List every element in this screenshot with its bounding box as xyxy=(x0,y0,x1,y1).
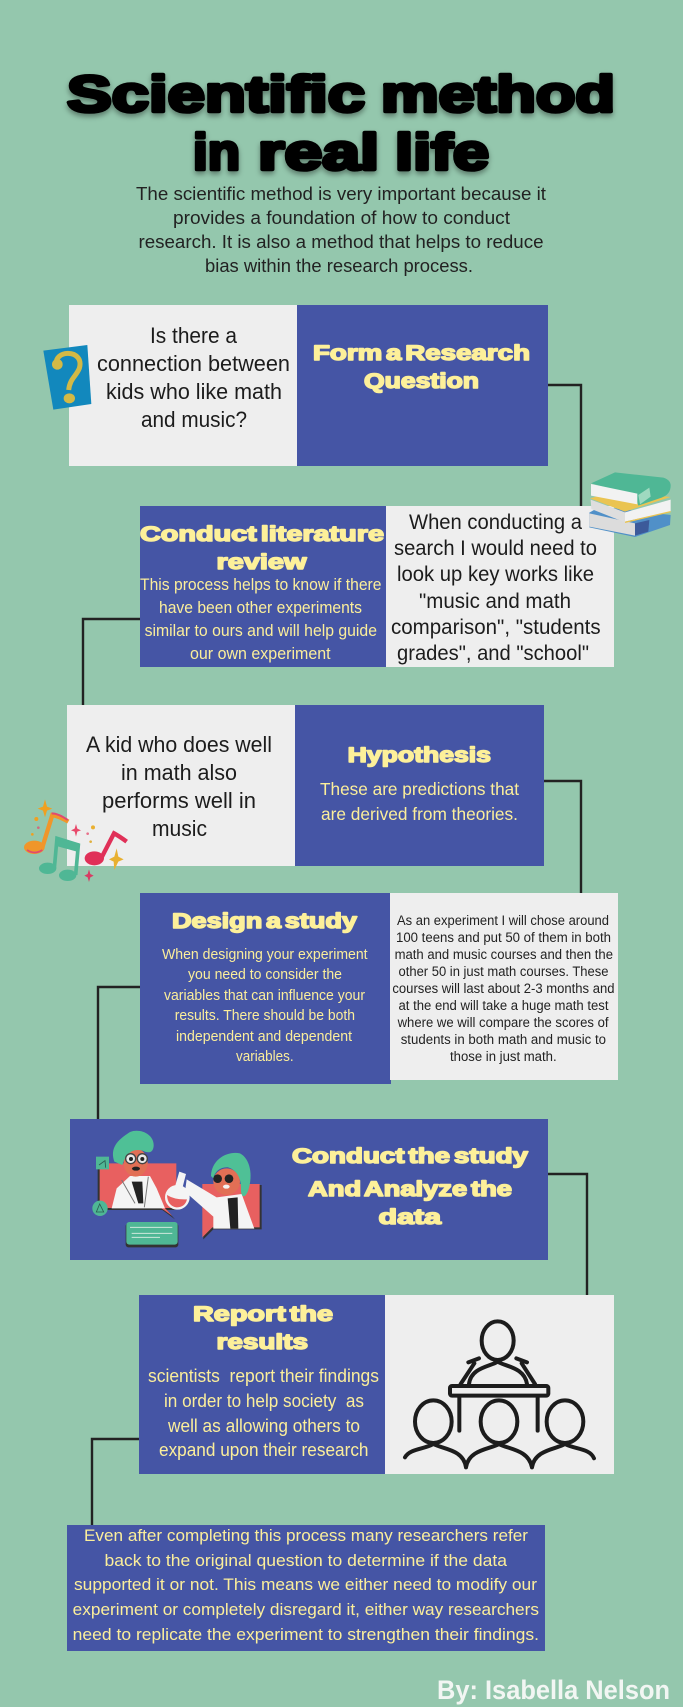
panel: conduct literature review xyxy=(140,506,614,667)
heading: conduct the study and analyze the data: And Analyze the xyxy=(308,1178,512,1201)
heading: conduct literature review xyxy=(140,523,384,574)
design description xyxy=(162,946,368,1065)
heading: conduct the study and analyze the data: data xyxy=(378,1206,441,1229)
heading: form a research question xyxy=(313,342,530,393)
title: life xyxy=(395,124,489,180)
connector: hypothesis to design xyxy=(544,781,581,893)
connector: conduct to report xyxy=(548,1174,587,1295)
design description: When designing your experiment xyxy=(162,946,368,963)
experiment plan text: As an experiment I will chose around xyxy=(397,913,609,928)
panel: conduct the study xyxy=(70,1119,548,1260)
report description: scientists report their findings xyxy=(148,1366,379,1386)
panel: report the results xyxy=(139,1295,614,1474)
panel: hypothesis xyxy=(67,705,544,866)
author credit: By: Isabella Nelson xyxy=(437,1675,670,1705)
connector: report to conclusion xyxy=(92,1439,139,1525)
intro paragraph: bias within the research process. xyxy=(205,256,473,276)
icon: music notes xyxy=(24,799,127,882)
experiment plan text: courses will last about 2-3 months and xyxy=(392,981,614,996)
connector: design to conduct xyxy=(98,987,140,1119)
heading: report the results: Report the xyxy=(193,1303,333,1326)
heading: conduct the study and analyze the data xyxy=(292,1145,528,1229)
conclusion text: Even after completing this process many researchers refer xyxy=(84,1526,528,1545)
heading: form a research question: Form a Research xyxy=(313,342,530,365)
experiment plan text: math and music courses and then the xyxy=(395,947,613,962)
literature review description: our own experiment xyxy=(190,645,331,663)
literature search text: grades", and "school" xyxy=(397,642,589,665)
report description: well as allowing others to xyxy=(167,1416,360,1436)
literature search text: comparison", "students xyxy=(391,616,601,639)
panel: conclusion xyxy=(67,1525,545,1651)
literature review description: This process helps to know if there xyxy=(140,576,382,594)
hypothesis description: These are predictions that xyxy=(320,779,519,799)
intro paragraph: The scientific method is very important because it xyxy=(136,184,546,204)
panel: form a research question xyxy=(69,305,548,466)
research question text: Is there a xyxy=(150,323,238,348)
heading: report the results xyxy=(193,1303,333,1354)
report description xyxy=(148,1366,379,1460)
research question text: kids who like math xyxy=(106,379,282,404)
conclusion text: need to replicate the experiment to strengthen their findings. xyxy=(73,1625,539,1644)
title: in xyxy=(193,124,240,180)
title: method xyxy=(381,66,615,122)
design description: variables. xyxy=(236,1048,294,1065)
experiment plan text xyxy=(392,913,614,1064)
hypothesis statement: music xyxy=(152,816,207,841)
panel: design a study xyxy=(140,893,618,1084)
literature review description xyxy=(140,576,382,663)
experiment plan text: students in both math and music to xyxy=(401,1032,606,1047)
heading: conduct literature review: Conduct literature xyxy=(140,523,384,546)
heading: report the results: results xyxy=(216,1331,308,1354)
icon: question mark card xyxy=(43,345,91,410)
research question text xyxy=(97,323,290,432)
literature search text: "music and math xyxy=(419,590,571,613)
conclusion text: experiment or completely disregard it, either way researchers xyxy=(73,1600,539,1619)
heading: conduct the study and analyze the data: Conduct the study xyxy=(292,1145,528,1168)
research question text: and music? xyxy=(141,407,247,432)
experiment plan text: other 50 in just math courses. These xyxy=(398,964,608,979)
title: real xyxy=(258,124,379,180)
design description: independent and dependent xyxy=(176,1028,353,1045)
design description: variables that can influence your xyxy=(164,987,365,1004)
intro paragraph: provides a foundation of how to conduct xyxy=(173,208,510,228)
hypothesis statement: performs well in xyxy=(102,788,256,813)
icon: two scientists with flask xyxy=(92,1131,262,1247)
research question text: connection between xyxy=(97,351,290,376)
conclusion text xyxy=(73,1526,539,1644)
icon: stack of books xyxy=(589,472,671,537)
title xyxy=(67,66,615,180)
literature search text xyxy=(391,511,601,665)
connector: literature review to hypothesis xyxy=(83,619,140,705)
hypothesis description xyxy=(320,779,519,824)
design description: you need to consider the xyxy=(188,966,342,983)
heading: conduct literature review: review xyxy=(216,551,307,574)
hypothesis statement xyxy=(86,732,272,841)
experiment plan text: 100 teens and put 50 of them in both xyxy=(396,930,611,945)
icon: presenter at podium with audience xyxy=(405,1321,594,1467)
hypothesis description: are derived from theories. xyxy=(321,804,518,824)
experiment plan text: those in just math. xyxy=(450,1049,557,1064)
literature search text: search I would need to xyxy=(394,537,597,560)
literature search text: look up key works like xyxy=(397,563,594,586)
intro paragraph: research. It is also a method that helps to reduce xyxy=(138,232,544,252)
experiment plan text: where we will compare the scores of xyxy=(397,1015,609,1030)
connector: question to literature review xyxy=(548,385,581,507)
heading: form a research question: Question xyxy=(364,370,479,393)
conclusion text: supported it or not. This means we either need to modify our xyxy=(74,1575,537,1594)
hypothesis statement: A kid who does well xyxy=(86,732,272,757)
intro paragraph xyxy=(136,184,546,276)
design description: results. There should be both xyxy=(175,1007,355,1024)
hypothesis statement: in math also xyxy=(121,760,237,785)
literature search text: When conducting a xyxy=(409,511,582,534)
report description: expand upon their research xyxy=(159,1440,368,1460)
literature review description: similar to ours and will help guide xyxy=(145,622,377,640)
title: Scientific xyxy=(67,66,365,122)
report description: in order to help society as xyxy=(164,1391,364,1411)
heading: design a study: Design a study xyxy=(172,910,357,933)
conclusion text: back to the original question to determine if the data xyxy=(104,1551,508,1570)
heading: hypothesis: Hypothesis xyxy=(348,744,491,767)
literature review description: have been other experiments xyxy=(159,599,362,617)
experiment plan text: at the end will take a huge math test xyxy=(398,998,609,1013)
